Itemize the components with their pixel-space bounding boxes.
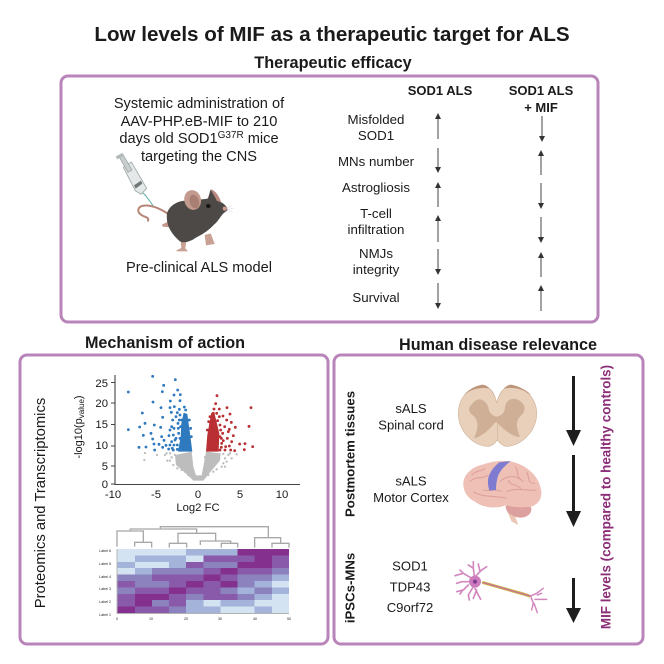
heading: mechanism of action: Mechanism of action (85, 334, 245, 352)
row labels: NMJs (359, 246, 393, 261)
panel: therapeutic efficacy (61, 76, 598, 322)
heatmap: 40 (253, 617, 257, 621)
text block: administration (114, 96, 285, 165)
y axis label: value (77, 399, 86, 418)
icon: spinal cord (458, 385, 537, 446)
label: postmortem tissues: Postmortem tissues (342, 391, 358, 517)
panel: human disease relevance (334, 355, 643, 644)
dendrogram (117, 527, 289, 548)
row labels: Survival (352, 290, 400, 305)
arrow: decrease in iPSC-MNs (566, 578, 581, 623)
heatmap labels: Label 2 (99, 600, 111, 604)
row labels: Astrogliosis (342, 180, 410, 195)
heatmap labels: Label 1 (99, 613, 111, 617)
arrows: SOD1 ALS + MIF (541, 116, 542, 311)
title: Low levels of MIF as a therapeutic target for ALS (94, 23, 570, 46)
tick labels: 25 (95, 378, 108, 390)
axes (111, 375, 300, 484)
column header: SOD1 ALS + MIF (509, 83, 574, 115)
tick labels: 5 (237, 489, 243, 501)
row labels: infiltration (348, 222, 404, 237)
heatmap: 20 (184, 617, 188, 621)
heatmap: 30 (218, 617, 222, 621)
column header: SOD1 ALS: SOD1 ALS (408, 83, 473, 98)
heatmap cells (118, 549, 289, 613)
heatmap labels: Label 5 (99, 562, 111, 566)
text block: administration: targeting the CNS (141, 149, 257, 165)
text block: administration: G37R (218, 130, 244, 141)
heatmap: 50 (287, 617, 291, 621)
column header: SOD1 ALS + MIF: + MIF (524, 100, 558, 115)
heatmap: 0 (116, 617, 118, 621)
label: iPSCs-MNs: iPSCs-MNs (342, 553, 358, 623)
label: sALS spinal cord (378, 401, 444, 432)
row labels: MNs number (338, 154, 415, 169)
volcano points (128, 376, 253, 481)
tick labels: 10 (95, 440, 108, 452)
text block: administration: mice (244, 131, 279, 147)
heading: human disease relevance: Human disease relevance (399, 336, 597, 354)
icon: brain (463, 461, 541, 525)
icon: syringe (116, 153, 153, 206)
tick labels: 10 (276, 489, 288, 501)
heatmap: 10 (149, 617, 153, 621)
arrow: decrease in motor cortex (566, 455, 581, 527)
label: SOD1 TDP43 C9orf72 (387, 558, 433, 615)
heading: therapeutic efficacy: Therapeutic efficacy (254, 54, 412, 72)
tick labels: -5 (151, 489, 161, 501)
text block: administration: AAV-PHP.eB-MIF to 210 (121, 114, 277, 130)
tick labels (95, 378, 288, 501)
tick labels: 5 (102, 461, 108, 473)
heatmap (99, 527, 291, 621)
row labels: Misfolded (348, 112, 404, 127)
text block: administration: Systemic administration of (114, 96, 285, 112)
tick labels: 20 (95, 398, 108, 410)
icon: neuron (455, 562, 547, 613)
label: proteomics and transcriptomics: Proteomics and Transcriptomics (33, 398, 49, 608)
row labels: SOD1 (358, 128, 394, 143)
column header: SOD1 ALS + MIF: SOD1 ALS (509, 83, 574, 98)
heatmap labels: Label 6 (99, 549, 111, 553)
panel: mechanism of action (20, 355, 328, 644)
tick labels: 0 (195, 489, 201, 501)
heatmap labels (99, 549, 111, 617)
label: SOD1 TDP43 C9orf72: TDP43 (390, 580, 430, 594)
label: MIF levels: MIF levels (compared to healthy controls) (598, 365, 614, 629)
label: sALS spinal cord: sALS (395, 401, 427, 416)
heatmap labels: Label 3 (99, 587, 111, 591)
y axis label: ) (73, 395, 85, 399)
label: sALS motor cortex (373, 474, 449, 505)
y axis label: -log10(p (73, 418, 85, 459)
row labels (338, 112, 415, 305)
x axis label: Log2 FC (176, 502, 220, 514)
label: SOD1 TDP43 C9orf72: C9orf72 (387, 600, 433, 615)
arrow: decrease in spinal cord (566, 376, 581, 446)
heatmap labels: Label 4 (99, 575, 111, 579)
caption: pre-clinical model: Pre-clinical ALS model (126, 260, 272, 276)
volcano plot (73, 375, 300, 514)
icon: mouse (138, 188, 233, 251)
arrows: SOD1 ALS (437, 116, 439, 306)
label: sALS motor cortex: Motor Cortex (373, 490, 449, 505)
heatmap axes (117, 549, 289, 614)
row labels: T-cell (360, 206, 392, 221)
tick labels: 0 (102, 479, 108, 491)
label: SOD1 TDP43 C9orf72: SOD1 (392, 558, 428, 574)
label: sALS spinal cord: Spinal cord (378, 418, 444, 432)
label: sALS motor cortex: sALS (395, 474, 427, 488)
text block: administration: days old SOD1 (119, 131, 218, 147)
tick labels: 15 (95, 419, 108, 431)
row labels: integrity (353, 262, 400, 277)
tick labels: -10 (105, 489, 121, 501)
